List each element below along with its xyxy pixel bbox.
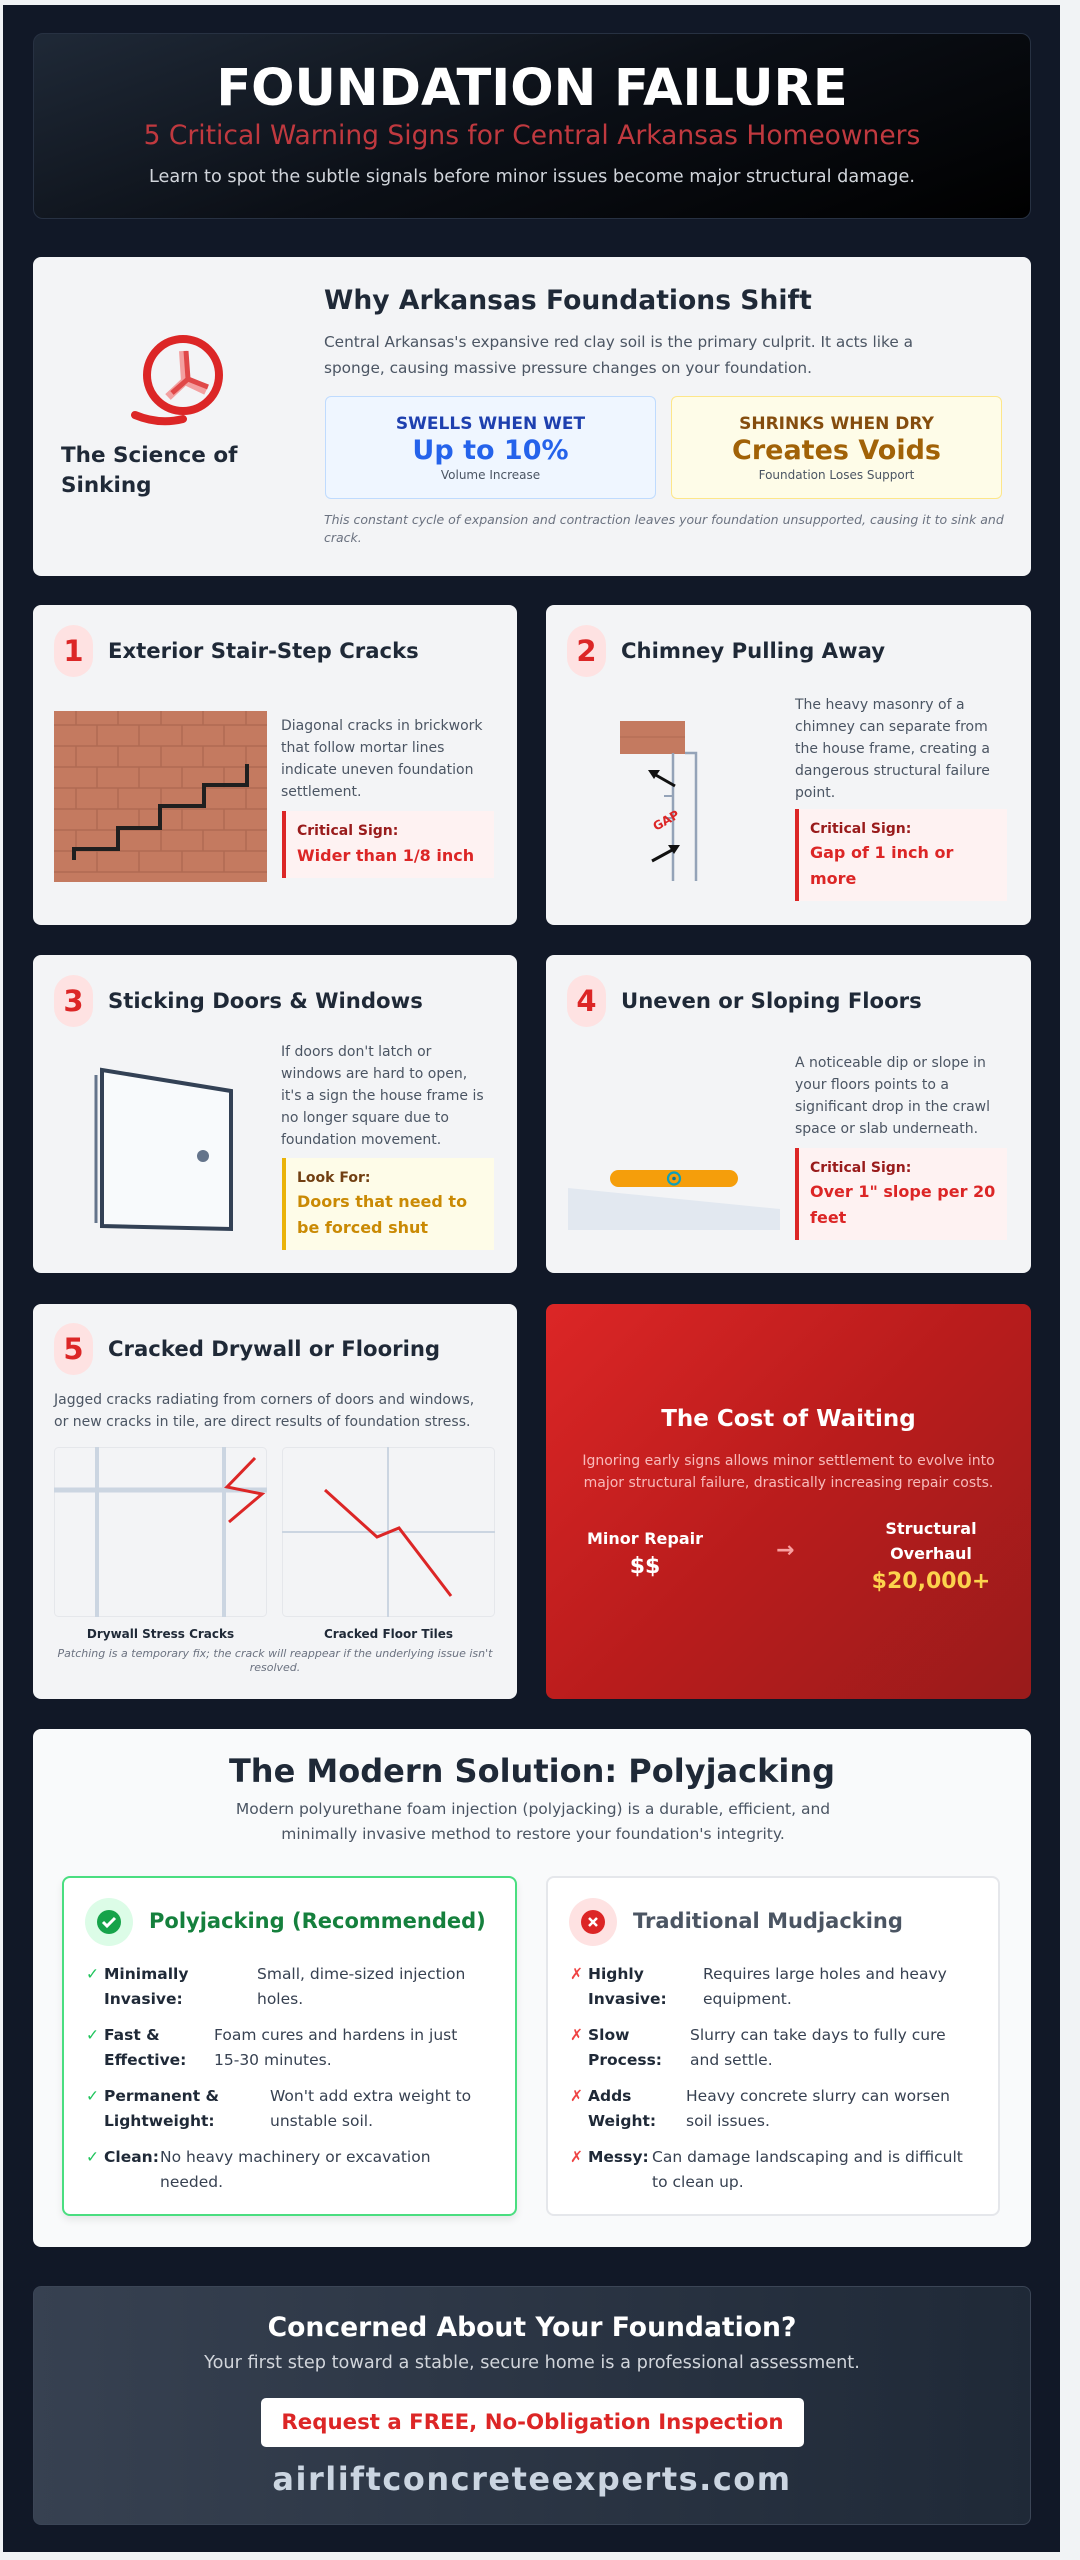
title 4: Uneven or Sloping Floors bbox=[621, 988, 922, 1013]
illustration: floor tile cracks bbox=[282, 1447, 495, 1641]
panel: sign 4 bbox=[546, 955, 1031, 1273]
text: cost: Ignoring early signs allows minor settlement to evolve into major structural failure, drastically increasing repair costs. bbox=[582, 1453, 995, 1491]
heading: science of sinking: The Science of bbox=[61, 443, 237, 468]
badge 3: 3 bbox=[63, 984, 84, 1018]
structural overhaul: $20,000+ bbox=[872, 1569, 990, 1594]
panel: sign 2 bbox=[546, 605, 1031, 925]
button: Request a FREE, No-Obligation Inspection bbox=[281, 2410, 784, 2435]
header bbox=[33, 33, 1031, 219]
title 2: Chimney Pulling Away bbox=[621, 638, 885, 663]
list: pros: ✓ bbox=[86, 2087, 99, 2105]
stat: shrinks: SHRINKS WHEN DRY bbox=[739, 414, 934, 434]
text 5: Jagged cracks radiating from corners of doors and windows, or new cracks in tile, are direct results of foundation stress. bbox=[54, 1392, 474, 1430]
panel: call to action bbox=[33, 2286, 1031, 2525]
list: cons: ✗ bbox=[570, 2148, 583, 2166]
list: cons: ✗ bbox=[570, 2087, 583, 2105]
note 5: Patching is a temporary fix; the crack will reappear if the underlying issue isn't resolved. bbox=[58, 1647, 492, 1674]
heading: why shift: Why Arkansas Foundations Shift bbox=[324, 285, 812, 316]
heading: science of sinking: Sinking bbox=[61, 473, 152, 498]
stat: swells bbox=[325, 396, 656, 499]
list: pros: Fast & Effective: bbox=[104, 2026, 186, 2069]
callout 2: Gap of 1 inch or more bbox=[810, 843, 953, 888]
panel: sign 1 bbox=[33, 605, 517, 925]
list: pros: ✓ bbox=[86, 2148, 99, 2166]
heading: polyjacking: Polyjacking (Recommended) bbox=[149, 1909, 486, 1933]
heading: science of sinking bbox=[61, 443, 238, 498]
badge 5: 5 bbox=[63, 1332, 84, 1366]
panel: sign 5 bbox=[33, 1304, 517, 1699]
arrow: → bbox=[776, 1538, 794, 1563]
list: pros: Minimally Invasive: bbox=[104, 1965, 188, 2008]
illustration: crooked door bbox=[94, 1068, 233, 1231]
list: cons: ✗ bbox=[570, 2026, 583, 2044]
callout 3: Look For: bbox=[297, 1170, 370, 1186]
list: cons: Heavy concrete slurry can worsen soil issues. bbox=[686, 2087, 950, 2130]
icon: x bbox=[569, 1898, 617, 1946]
list: cons: Messy: bbox=[588, 2148, 649, 2166]
badge 2: 2 bbox=[576, 634, 597, 668]
title 1: Exterior Stair-Step Cracks bbox=[108, 638, 419, 663]
illustration: chimney gap: GAP bbox=[650, 807, 682, 834]
website: airliftconcreteexperts.com bbox=[272, 2460, 792, 2498]
structural overhaul: Overhaul bbox=[890, 1544, 972, 1563]
note: This constant cycle of expansion and contraction leaves your foundation unsupported, causing it to sink and crack. bbox=[324, 512, 1004, 545]
heading: mudjacking: Traditional Mudjacking bbox=[633, 1909, 903, 1933]
list: cons: Requires large holes and heavy equipment. bbox=[703, 1965, 947, 2008]
callout 1: Wider than 1/8 inch bbox=[297, 846, 474, 865]
list: pros: Foam cures and hardens in just 15-30 minutes. bbox=[214, 2026, 457, 2069]
panel: sign 3 bbox=[33, 955, 517, 1273]
box: polyjacking bbox=[62, 1876, 517, 2216]
minor repair: $$ bbox=[630, 1554, 660, 1579]
list: cons: ✗ bbox=[570, 1965, 583, 1983]
list: cons bbox=[570, 1965, 963, 2191]
text 1: Diagonal cracks in brickwork that follow mortar lines indicate uneven foundation settlement. bbox=[281, 718, 483, 800]
text: cta: Your first step toward a stable, secure home is a professional assessment. bbox=[204, 2353, 860, 2373]
badge 5 bbox=[54, 1323, 93, 1375]
list: pros: Won't add extra weight to unstable soil. bbox=[270, 2087, 471, 2130]
callout 4 bbox=[795, 1148, 1007, 1240]
list: cons: Highly Invasive: bbox=[588, 1965, 667, 2008]
panel: cost of waiting bbox=[546, 1304, 1031, 1699]
title 3: Sticking Doors & Windows bbox=[108, 988, 423, 1013]
illustration: drywall cracks bbox=[54, 1447, 267, 1641]
badge 1 bbox=[54, 625, 93, 677]
stat: swells: Up to 10% bbox=[412, 435, 569, 466]
stat: swells: SWELLS WHEN WET bbox=[396, 414, 585, 434]
list: pros bbox=[86, 1965, 471, 2191]
list: pros: ✓ bbox=[86, 1965, 99, 1983]
minor repair bbox=[587, 1529, 703, 1579]
text: explanation: Central Arkansas's expansive red clay soil is the primary culprit. It acts like a sponge, causing massive pressure changes on your foundation. bbox=[324, 333, 913, 377]
callout 4: Over 1" slope per 20 feet bbox=[810, 1182, 995, 1227]
structural overhaul: Structural bbox=[885, 1519, 977, 1538]
list: pros: Small, dime-sized injection holes. bbox=[257, 1965, 465, 2008]
panel: modern solution bbox=[33, 1729, 1031, 2247]
tagline: Learn to spot the subtle signals before minor issues become major structural damage. bbox=[149, 167, 915, 187]
callout 2 bbox=[795, 809, 1007, 901]
text 4: A noticeable dip or slope in your floors points to a significant drop in the crawl space or slab underneath. bbox=[795, 1055, 990, 1137]
illustration: level on sloping floor bbox=[568, 1170, 780, 1230]
callout 3: Doors that need to be forced shut bbox=[297, 1192, 467, 1237]
illustration: brick wall crack bbox=[54, 711, 267, 882]
list: cons: Slurry can take days to fully cure and settle. bbox=[690, 2026, 946, 2069]
illustration: floor tile cracks: Cracked Floor Tiles bbox=[324, 1627, 453, 1641]
list: pros: Permanent & Lightweight: bbox=[104, 2087, 219, 2130]
callout 1 bbox=[282, 811, 494, 878]
title: FOUNDATION FAILURE bbox=[216, 59, 848, 118]
stat: shrinks: Creates Voids bbox=[732, 435, 941, 466]
list: pros: ✓ bbox=[86, 2026, 99, 2044]
callout 2: Critical Sign: bbox=[810, 821, 911, 837]
icon: sinking gauge bbox=[131, 335, 223, 426]
callout 1: Critical Sign: bbox=[297, 823, 398, 839]
stat: shrinks: Foundation Loses Support bbox=[759, 468, 914, 482]
minor repair: Minor Repair bbox=[587, 1529, 703, 1548]
callout 3 bbox=[282, 1158, 494, 1250]
illustration: chimney gap bbox=[620, 721, 698, 881]
text 3: If doors don't latch or windows are hard to open, it's a sign the house frame is no longer square due to foundation movement. bbox=[281, 1044, 484, 1148]
list: pros: Clean: bbox=[104, 2148, 159, 2166]
subtitle: 5 Critical Warning Signs for Central Arkansas Homeowners bbox=[144, 120, 920, 151]
illustration: drywall cracks: Drywall Stress Cracks bbox=[87, 1627, 234, 1641]
badge 2 bbox=[567, 625, 606, 677]
list: cons: Slow Process: bbox=[588, 2026, 662, 2069]
structural overhaul bbox=[872, 1519, 990, 1594]
list: cons: Adds Weight: bbox=[588, 2087, 656, 2130]
heading: solution: The Modern Solution: Polyjacking bbox=[229, 1752, 835, 1790]
text 2: The heavy masonry of a chimney can separate from the house frame, creating a dangerous structural failure point. bbox=[795, 697, 990, 801]
stat: swells: Volume Increase bbox=[441, 468, 540, 482]
title 5: Cracked Drywall or Flooring bbox=[108, 1336, 440, 1361]
badge 1: 1 bbox=[63, 634, 84, 668]
text: solution: Modern polyurethane foam injection (polyjacking) is a durable, efficient, and minimally invasive method to restore your foundation's integrity. bbox=[236, 1800, 830, 1843]
button bbox=[261, 2398, 804, 2447]
heading: cost: The Cost of Waiting bbox=[661, 1406, 916, 1432]
list: cons: Can damage landscaping and is difficult to clean up. bbox=[652, 2148, 963, 2191]
badge 4: 4 bbox=[576, 984, 597, 1018]
panel: science of sinking bbox=[33, 257, 1031, 576]
stat: shrinks bbox=[671, 396, 1002, 499]
box: mudjacking bbox=[546, 1876, 1000, 2216]
icon: check bbox=[85, 1898, 133, 1946]
heading: cta: Concerned About Your Foundation? bbox=[268, 2312, 796, 2343]
list: pros: No heavy machinery or excavation needed. bbox=[160, 2148, 431, 2191]
badge 4 bbox=[567, 975, 606, 1027]
badge 3 bbox=[54, 975, 93, 1027]
callout 4: Critical Sign: bbox=[810, 1160, 911, 1176]
